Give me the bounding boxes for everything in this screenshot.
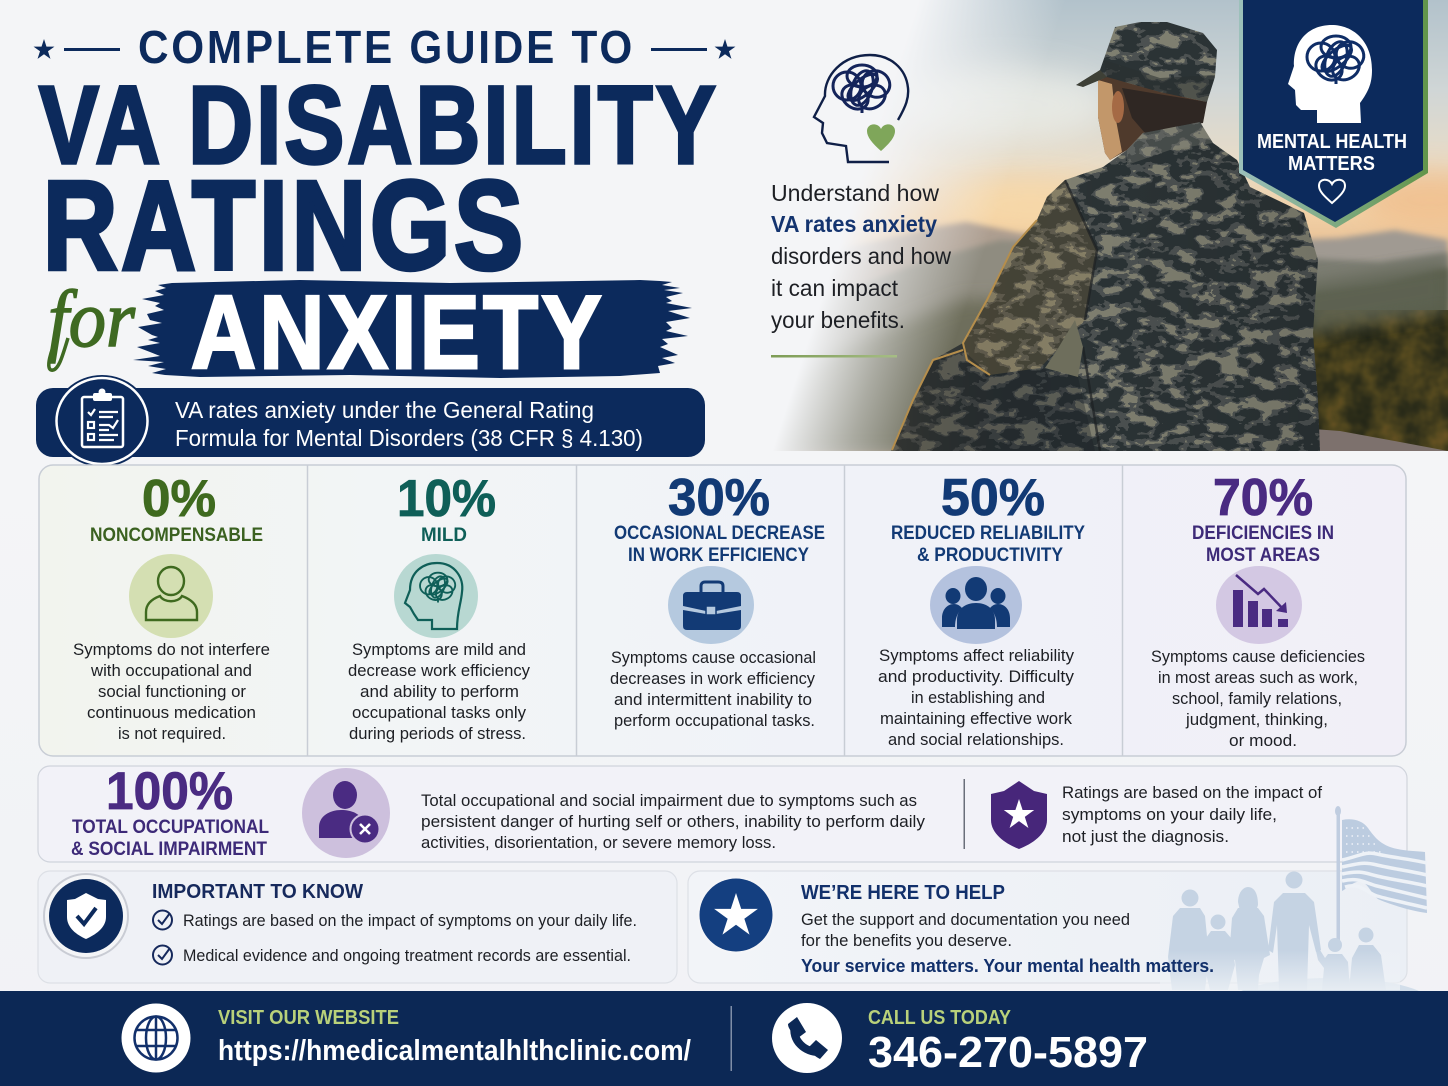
website text [218,1007,691,1067]
tier: 0 percent: social functioning or [98,682,246,701]
phone text [868,1007,1148,1077]
tier: 0 percent: Symptoms do not interfere [73,640,270,659]
tier: 70 percent: school, family relations, [1172,689,1342,708]
headline: VA disability: VA DISABILITY [39,64,719,187]
icon: person with x [302,768,390,858]
icon: clipboard [53,375,151,467]
tier: 50 percent: REDUCED RELIABILITY [891,523,1085,544]
tier: 30 percent: IN WORK EFFICIENCY [628,545,809,566]
banner text [175,397,643,451]
tier: 10 percent: and ability to perform [360,682,519,701]
tier: 10 percent: decrease work efficiency [348,661,530,680]
panel: important to know [38,871,677,983]
headline: ratings: RATINGS [43,155,527,296]
intro text: VA rates anxiety [771,211,937,237]
head and neck [1098,75,1207,160]
badge: mental health matters [1239,0,1428,228]
icon: star circle [697,876,775,954]
family [1168,872,1386,990]
tier: 30 percent: and intermittent inability to [614,690,812,709]
tier: 70 percent: MOST AREAS [1206,545,1320,566]
panel: 100 percent tier [38,762,1407,862]
tier: 30 percent [610,469,825,730]
icon: shield with check [44,874,128,958]
tier: 0 percent: 0% [142,470,216,528]
icon: head with brain [394,554,478,638]
tier: 30 percent: 30% [668,469,770,527]
tier: 10 percent: occupational tasks only [352,703,526,722]
ratings note: Ratings are based on the impact of [1062,783,1322,802]
uniform [880,115,1330,455]
100 percent description [421,791,925,852]
tier: 30 percent: Symptoms cause occasional [611,648,816,667]
checklist [153,910,637,965]
help text: for the benefits you deserve. [801,931,1012,950]
intro text: Understand how [771,180,939,206]
icon: briefcase [668,566,754,644]
icon: globe [122,1004,190,1072]
tier: 10 percent: during periods of stress. [349,724,526,743]
badge text: MENTAL HEALTH [1257,131,1407,153]
tier: 50 percent: and social relationships. [888,730,1064,749]
help text [801,910,1214,976]
phone text: CALL US TODAY [868,1007,1012,1029]
warm rim light [892,220,1037,450]
hero photo: soldier overlooking mountains [740,0,1448,455]
tier: 70 percent: or mood. [1229,731,1297,750]
heading: 100 percent: 100% [106,762,233,821]
heading: 100 percent [71,762,269,860]
heading: IMPORTANT TO KNOW [152,881,363,903]
tier: 50 percent: 50% [941,469,1045,527]
banner text: VA rates anxiety under the General Rating [175,397,594,423]
100 percent description: persistent danger of hurting self or others, inability to perform daily [421,812,925,831]
help text: Your service matters. Your mental health matters. [801,956,1214,976]
tier: 50 percent: maintaining effective work [880,709,1072,728]
intro block [771,55,951,358]
badge text: MATTERS [1288,153,1375,175]
badge text [1257,131,1407,175]
icon: purple shield with star [991,781,1047,849]
cap [1076,22,1217,102]
intro text: disorders and how [771,243,951,269]
panel: here to help [688,806,1430,1026]
tier: 70 percent: 70% [1213,469,1313,527]
heading: 100 percent: & SOCIAL IMPAIRMENT [71,839,267,860]
ratings note: symptoms on your daily life, [1062,805,1277,824]
phone text: 346-270-5897 [868,1028,1148,1077]
tier: 70 percent: Symptoms cause deficiencies [1151,647,1365,666]
tier: 10 percent: 10% [397,470,496,528]
tier: 0 percent: with occupational and [90,661,252,680]
website text: https://hmedicalmentalhlthclinic.com/ [218,1035,691,1067]
left fade of the photo [740,0,1046,451]
tier: 50 percent: Symptoms affect reliability [879,646,1074,665]
icon: heart outline [1319,180,1345,203]
tier: 70 percent [1151,469,1365,750]
heading: 100 percent: TOTAL OCCUPATIONAL [72,817,269,838]
checklist: Ratings are based on the impact of symptoms on your daily life. [183,911,637,930]
illustration: family and flag silhouette [1160,806,1430,1026]
icon: phone [772,1003,842,1073]
tier: 50 percent: and productivity. Difficulty [878,667,1075,686]
icon: person outline [129,554,213,638]
tier: 30 percent: perform occupational tasks. [614,711,815,730]
brush stroke [133,280,692,378]
panel: rating tiers [39,465,1406,756]
tier: 0 percent: NONCOMPENSABLE [90,525,263,546]
tier: 70 percent: judgment, thinking, [1185,710,1328,729]
tier: 50 percent: in establishing and [911,688,1045,707]
icon: white head with brain [1288,25,1372,123]
tier: 0 percent [73,470,270,743]
highlighted word: anxiety: ANXIETY [191,275,605,391]
tier: 0 percent: is not required. [118,724,226,743]
tier: 30 percent: decreases in work efficiency [610,669,815,688]
intro text [771,180,951,333]
100 percent description: activities, disorientation, or severe memory loss. [421,833,776,852]
title block [34,21,735,391]
tier: 10 percent: MILD [421,525,467,546]
intro text: your benefits. [771,307,905,333]
icon: group of people [930,566,1022,644]
icon: falling bar chart [1216,566,1302,644]
tier: 10 percent [348,470,530,743]
rating formula banner [36,375,705,467]
tier: 0 percent: continuous medication [87,703,256,722]
script word: for: for [48,276,136,364]
eyebrow: complete guide to: COMPLETE GUIDE TO [138,21,635,73]
flag [1342,819,1427,913]
tier: 50 percent [878,469,1085,749]
tier: 10 percent: Symptoms are mild and [352,640,526,659]
heading: WE’RE HERE TO HELP [801,882,1005,904]
tier: 50 percent: & PRODUCTIVITY [917,545,1063,566]
100 percent description: Total occupational and social impairment due to symptoms such as [421,791,917,810]
website text: VISIT OUR WEBSITE [218,1007,399,1029]
icon: head with brain and heart [814,55,908,162]
tier: 30 percent: OCCASIONAL DECREASE [614,523,825,544]
footer [0,991,1448,1086]
checklist: Medical evidence and ongoing treatment records are essential. [183,946,631,965]
intro text: it can impact [771,275,899,301]
banner text: Formula for Mental Disorders (38 CFR § 4.130) [175,425,643,451]
soldier [880,15,1330,455]
ratings note [1062,783,1322,846]
tier: 70 percent: DEFICIENCIES IN [1192,523,1334,544]
help text: Get the support and documentation you need [801,910,1130,929]
ratings note: not just the diagnosis. [1062,827,1229,846]
tier: 70 percent: in most areas such as work, [1158,668,1358,687]
